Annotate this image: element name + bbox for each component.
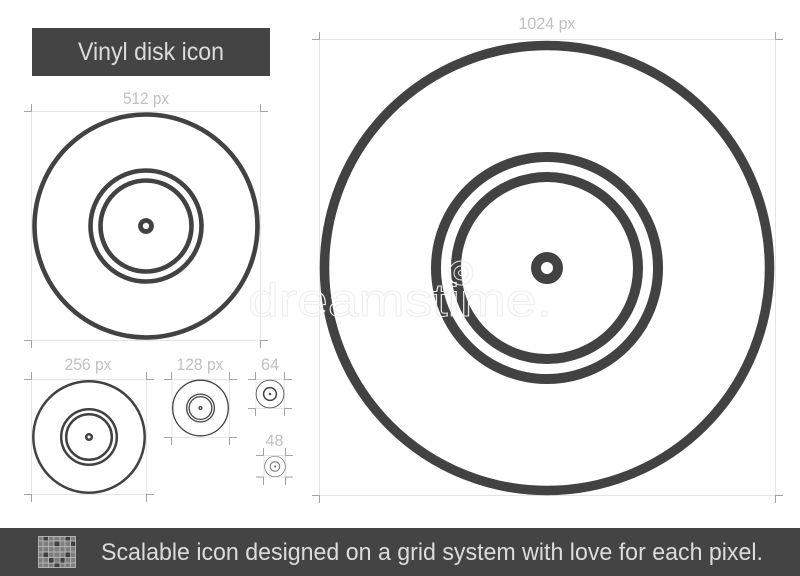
watermark [248,261,552,326]
title banner: Vinyl disk icon [78,38,224,66]
1024 px icon frame [312,32,783,503]
48 vinyl disk icon [265,456,285,477]
icon: pixel grid [38,536,76,568]
256 px size label: 256 px [64,356,112,374]
128 px icon frame [164,372,237,445]
48 icon frame [256,448,293,485]
title banner [32,28,270,76]
64 vinyl disk icon [256,380,284,408]
1024 px size label: 1024 px [518,15,576,33]
64 icon frame [248,372,292,416]
512 px vinyl disk icon [34,114,258,338]
1024 px vinyl disk icon [324,46,770,490]
footer bar [0,528,800,576]
256 px vinyl disk icon [33,381,145,493]
128 px vinyl disk icon [173,380,228,436]
48 size label: 48 [266,432,284,450]
64 size label: 64 [261,356,279,374]
256 px icon frame [24,372,154,502]
128 px size label: 128 px [176,356,224,374]
footer tagline: Scalable icon designed on a grid system with love for each pixel. [101,539,763,566]
512 px icon frame [24,104,268,348]
watermark: dreamstime. [248,274,552,326]
512 px size label: 512 px [123,90,170,108]
